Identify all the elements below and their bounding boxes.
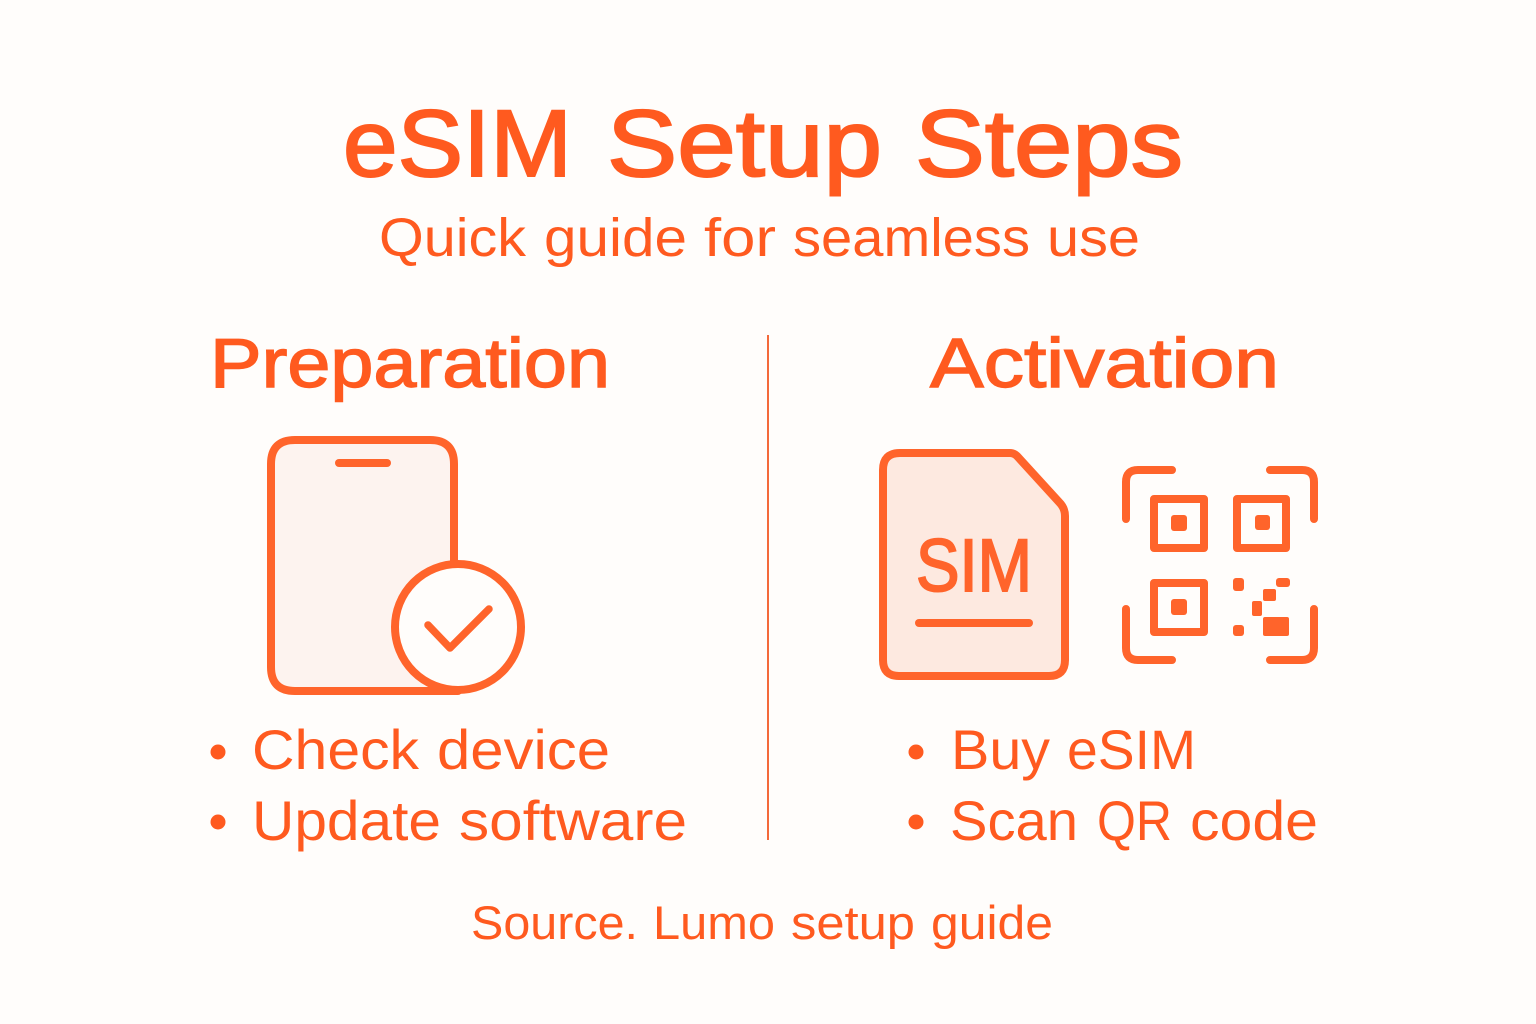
heading: activation: Activation <box>930 324 1279 402</box>
bullet list: activation <box>908 718 1318 852</box>
title: eSIM <box>343 91 572 197</box>
bullet list: preparation: software <box>459 789 687 852</box>
bullet list: preparation: Check <box>252 718 420 781</box>
title: Setup <box>607 91 882 197</box>
source note: Lumo <box>653 896 775 949</box>
subtitle: guide <box>544 208 687 268</box>
icon: QR code <box>1126 470 1314 660</box>
subtitle <box>379 208 1140 268</box>
bullet list: activation: code <box>1190 789 1318 852</box>
subtitle: use <box>1047 208 1140 268</box>
bullet list: preparation: device <box>437 718 610 781</box>
bullet list: preparation <box>210 718 687 852</box>
bullet list: activation: Buy <box>951 718 1050 781</box>
icon: phone with check mark <box>271 440 521 691</box>
icon: SIM card <box>883 453 1065 676</box>
source note <box>471 896 1053 949</box>
bullet list: activation: eSIM <box>1067 718 1196 781</box>
icon: SIM card: SIM <box>916 524 1032 607</box>
heading: preparation: Preparation <box>210 324 610 402</box>
source note: guide <box>931 896 1053 949</box>
source note: Source. <box>471 896 638 949</box>
title: Steps <box>915 91 1183 197</box>
divider <box>767 335 769 840</box>
subtitle: for <box>704 208 776 268</box>
panel: activation <box>883 324 1318 852</box>
title <box>343 91 1183 197</box>
bullet list: preparation: Update <box>252 789 441 852</box>
bullet list: activation: Scan <box>950 789 1078 852</box>
source note: setup <box>791 896 915 949</box>
panel: preparation <box>210 324 687 852</box>
bullet list: activation: QR <box>1097 789 1172 852</box>
subtitle: Quick <box>379 208 527 268</box>
subtitle: seamless <box>793 208 1030 268</box>
